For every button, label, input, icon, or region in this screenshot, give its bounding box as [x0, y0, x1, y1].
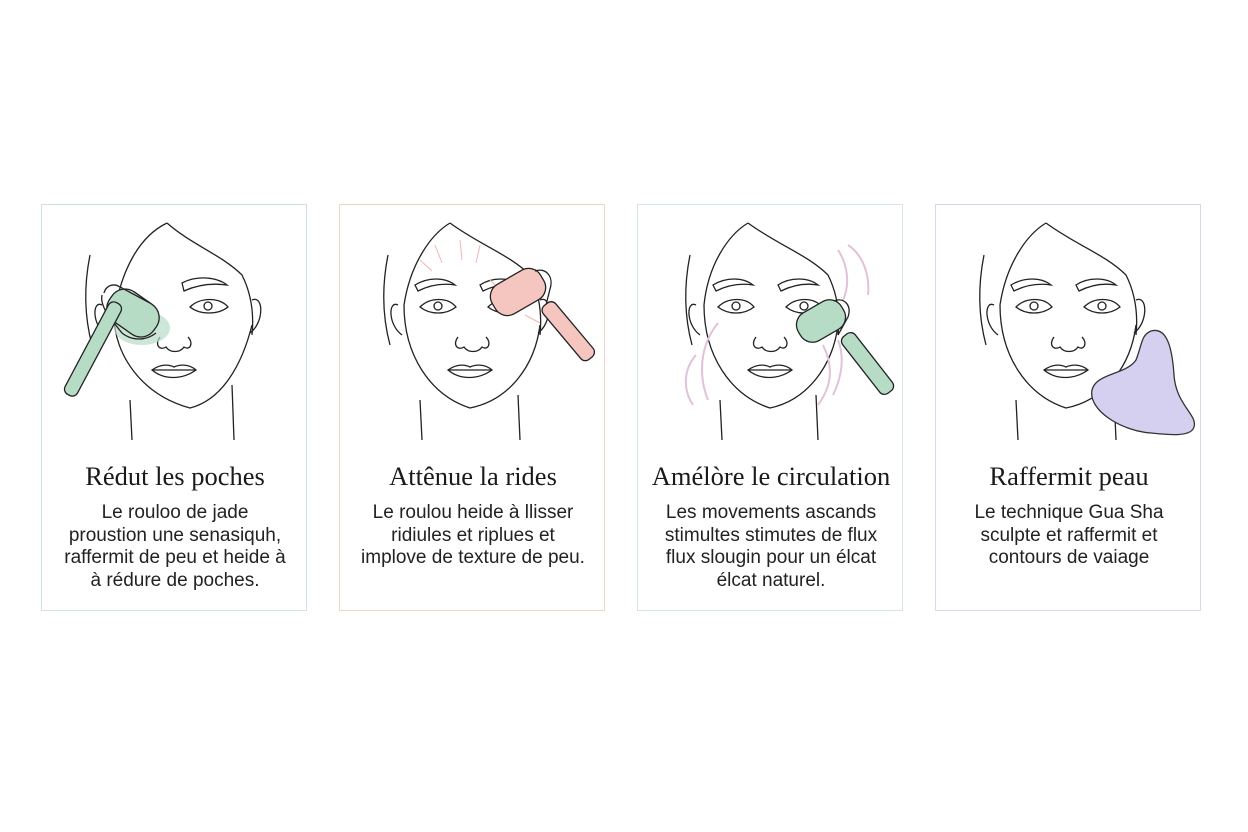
panel: reduces wrinkles	[339, 204, 605, 611]
text block: élcat naturel.	[717, 570, 825, 591]
illustration: face with roller and arrows	[684, 222, 894, 440]
text block: Le rouloo de jade	[102, 502, 248, 523]
text block: Le roulou heide à llisser	[373, 502, 573, 523]
text block: contours de vaiage	[989, 547, 1149, 568]
heading: Rédut les poches	[85, 461, 265, 491]
text block: à rédure de poches.	[90, 570, 260, 591]
panel: reduces puffiness	[41, 204, 307, 611]
text block: proustion une senasiquh,	[69, 525, 281, 546]
text block	[64, 502, 286, 591]
text block: raffermit de peu et heide à	[64, 547, 286, 568]
text block: flux slougin pour un élcat	[666, 547, 876, 568]
illustration: face with jade roller under eye	[64, 222, 262, 440]
text block: Les movements ascands	[666, 502, 876, 523]
text block	[665, 502, 877, 591]
text block: sculpte et raffermit et	[980, 525, 1158, 546]
text block: Le technique Gua Sha	[974, 502, 1164, 523]
heading: Raffermit peau	[989, 461, 1149, 491]
panel: firms skin	[935, 204, 1201, 611]
heading: Attênue la rides	[389, 461, 557, 491]
heading: Amélòre le circulation	[652, 461, 890, 491]
text block: stimultes stimutes de flux	[665, 525, 877, 546]
panel: improves circulation	[637, 204, 903, 611]
text block: ridiules et riplues et	[391, 525, 555, 546]
illustration: face with pink roller	[383, 222, 596, 440]
text block	[361, 502, 585, 568]
text block	[974, 502, 1164, 568]
illustration: face with gua sha	[979, 222, 1196, 440]
text block: implove de texture de peu.	[361, 547, 585, 568]
